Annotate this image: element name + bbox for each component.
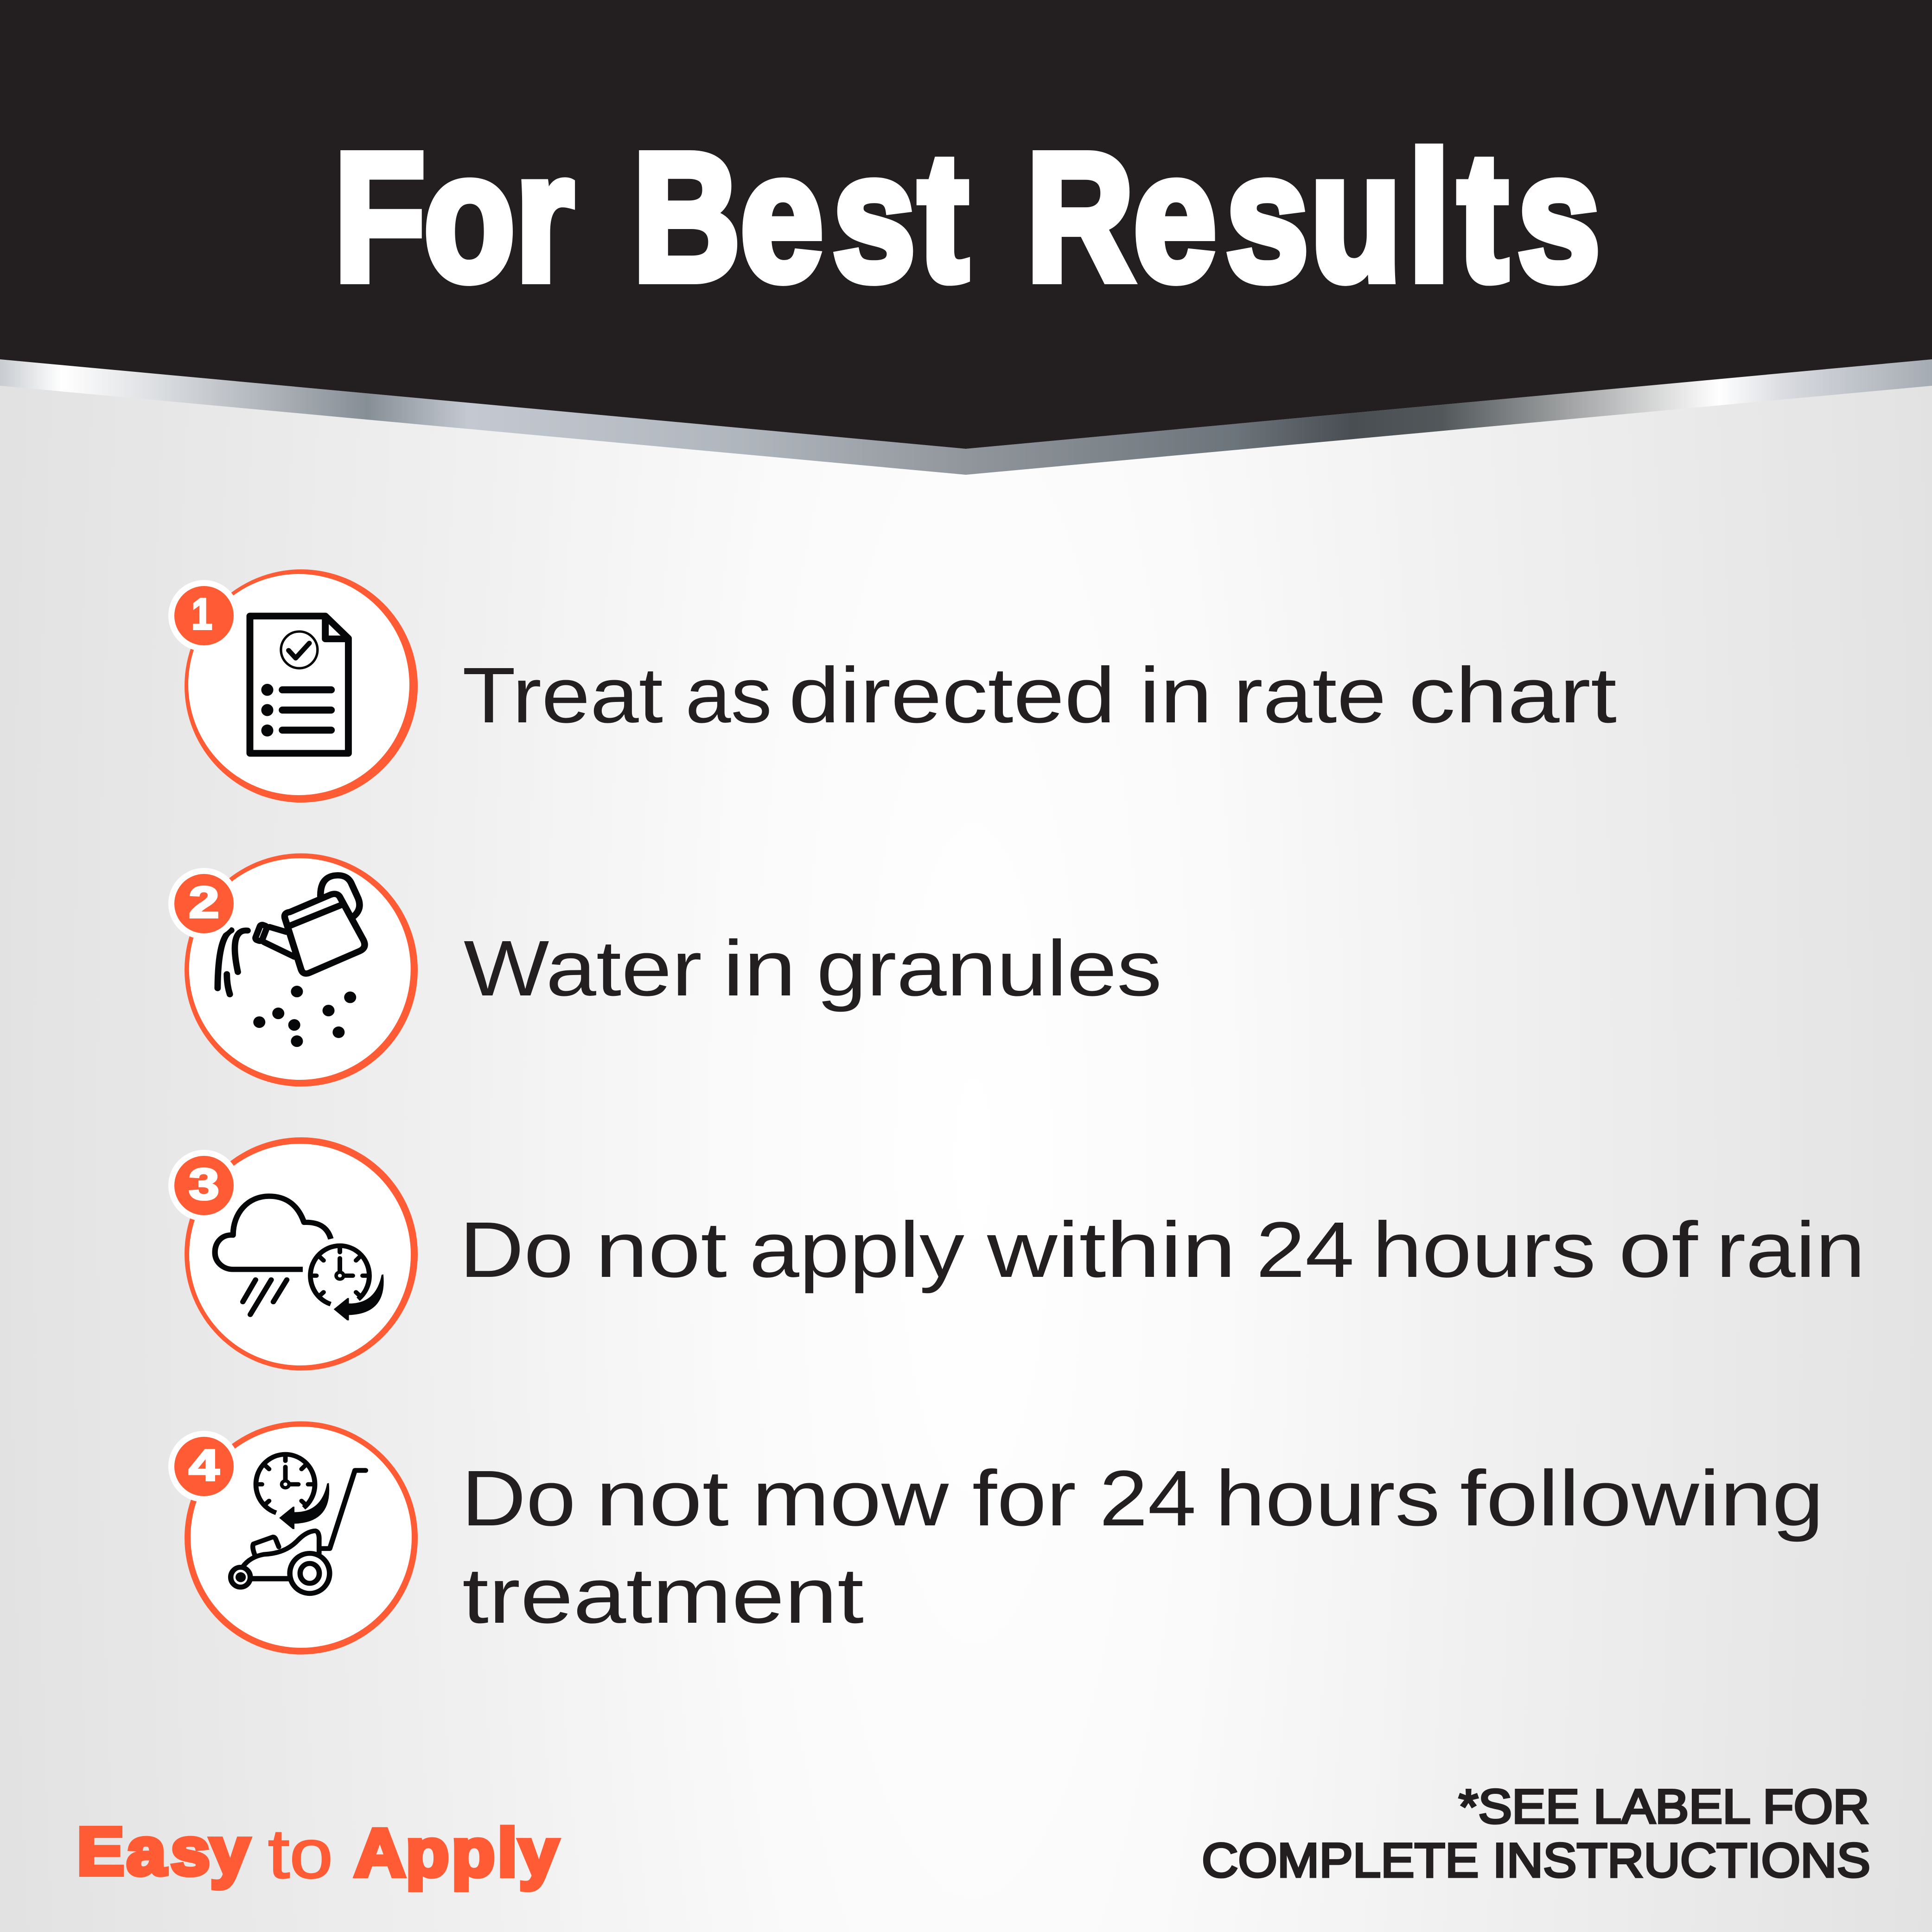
step 2 [168, 853, 1162, 1087]
badge 4: 4 [189, 1441, 219, 1490]
step 4 text [461, 1454, 1824, 1640]
step 3 text: 24 [1256, 1206, 1354, 1294]
step 4 text: Do [461, 1454, 576, 1543]
step 3 text: within [987, 1206, 1236, 1294]
footnote: *SEE LABEL FOR [1459, 1780, 1869, 1834]
badge 3 [168, 1150, 240, 1221]
step 3 text: rain [1716, 1206, 1865, 1294]
step 4 text: for [972, 1454, 1076, 1543]
tagline: Easy to Apply: to [268, 1815, 333, 1893]
step 4 [168, 1422, 1824, 1654]
step 2 circle [185, 853, 418, 1087]
chrome chevron band [0, 359, 1932, 475]
step 4 text: 24 [1099, 1454, 1196, 1543]
step 1 [168, 569, 1617, 803]
step 4 text: not [596, 1454, 729, 1543]
footnote [1202, 1780, 1870, 1887]
badge 1: 1 [191, 589, 212, 639]
step 3 text: apply [749, 1206, 964, 1294]
header panel [0, 0, 1932, 449]
step 2 text: Water [464, 925, 702, 1013]
title [334, 115, 1600, 318]
step 4 text: mow [752, 1454, 949, 1543]
step 4 text: treatment [462, 1552, 864, 1640]
step 3 circle [185, 1137, 418, 1371]
title: Results [1027, 115, 1600, 318]
step 2 text: granules [816, 925, 1162, 1013]
step 4 text: hours [1215, 1454, 1440, 1543]
step 3 text: of [1619, 1206, 1698, 1294]
icon: watering can and granules [217, 875, 364, 1047]
step 1 text: directed [789, 651, 1116, 740]
icon: rain cloud and clock [215, 1196, 384, 1320]
tagline: Easy to Apply [77, 1813, 558, 1893]
step 3 text: not [595, 1206, 727, 1294]
badge 3: 3 [189, 1160, 219, 1209]
step 1 text: in [1139, 651, 1212, 740]
tagline: Easy to Apply: Apply [354, 1815, 558, 1890]
footnote: COMPLETE INSTRUCTIONS [1202, 1834, 1870, 1887]
badge 1 [168, 580, 240, 651]
badge 2: 2 [189, 878, 219, 927]
step 2 text: in [723, 925, 796, 1013]
step 1 text: chart [1409, 651, 1617, 740]
tagline: Easy to Apply: Easy [77, 1813, 249, 1889]
badge 4 [168, 1431, 240, 1502]
badge 2 [168, 868, 240, 939]
step 1 text: rate [1233, 651, 1386, 740]
step 1 text: Treat [462, 651, 663, 740]
step 3 [168, 1137, 1865, 1371]
title: Best [633, 115, 968, 318]
icon: clock and lawn mower [231, 1454, 366, 1594]
step 4 text: following [1460, 1454, 1824, 1543]
step 1 circle [185, 569, 418, 803]
icon: document checklist [250, 616, 348, 753]
step 3 text: Do [459, 1206, 574, 1294]
step 3 text: hours [1372, 1206, 1596, 1294]
title: For [334, 115, 574, 318]
step 1 text: as [685, 651, 772, 740]
step 4 circle [185, 1422, 418, 1654]
